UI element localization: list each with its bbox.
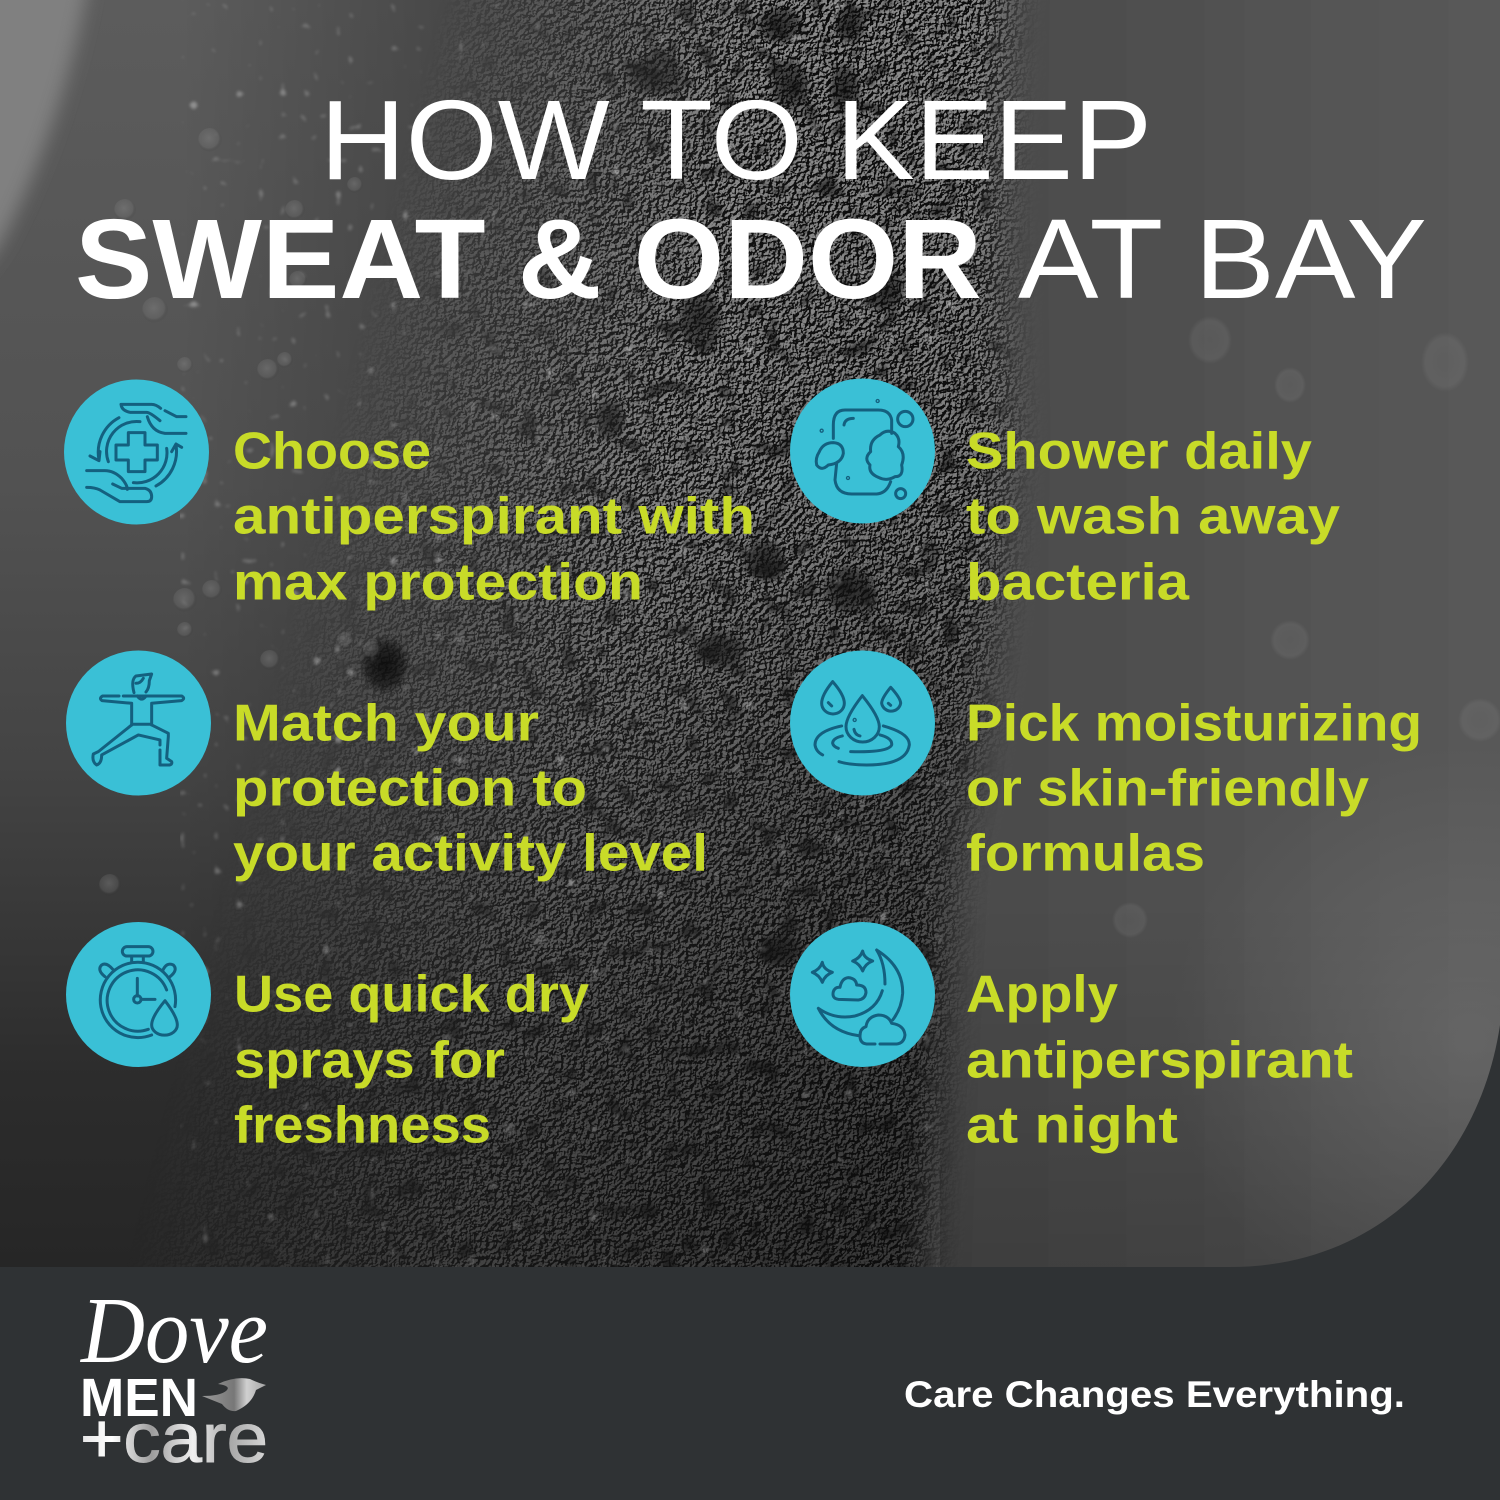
tip text: antiperspirant with <box>233 488 755 546</box>
tip 3: quick dry sprays <box>66 922 589 1154</box>
title line 1: HOW TO KEEP <box>320 77 1152 203</box>
tip text: Match your <box>233 694 539 752</box>
tip 1: choose antiperspirant <box>64 380 755 612</box>
tip text: antiperspirant <box>966 1032 1353 1090</box>
icon: water drops and ripples <box>790 650 935 796</box>
icon: soap and foam <box>790 378 935 524</box>
tip text: or skin-friendly <box>966 760 1369 818</box>
tip text: sprays for <box>234 1032 505 1090</box>
tip text: to wash away <box>966 488 1340 546</box>
tip text: bacteria <box>966 554 1190 612</box>
icon: moon, stars and clouds <box>790 922 935 1067</box>
tip text: Pick moisturizing <box>966 694 1422 752</box>
logo word +care: +care <box>80 1399 268 1477</box>
tip text: Choose <box>233 422 431 480</box>
tip text: max protection <box>233 554 643 612</box>
tagline: Care Changes Everything. <box>904 1374 1405 1415</box>
tip 5: moisturizing formulas <box>790 650 1422 882</box>
footer band with curved corner <box>0 1025 1500 1500</box>
tip text: Use quick dry <box>234 966 589 1024</box>
title <box>75 77 1427 322</box>
logo: Dove Men+Care <box>79 1279 268 1477</box>
title line 2: SWEAT & ODOR <box>75 196 982 322</box>
tip 6: apply at night <box>790 922 1353 1154</box>
logo wordmark Dove: Dove <box>79 1279 268 1383</box>
title line 2: AT BAY <box>1018 196 1427 322</box>
tip text: protection to <box>233 760 587 818</box>
icon: stopwatch and drop <box>66 922 211 1067</box>
tip text: Shower daily <box>966 422 1312 480</box>
tip text: formulas <box>966 824 1205 882</box>
tip text: freshness <box>234 1096 491 1154</box>
tip 4: shower daily <box>790 378 1340 612</box>
tip 2: match protection to activity <box>66 650 708 882</box>
tip text: Apply <box>966 966 1118 1024</box>
tip text: your activity level <box>233 824 708 882</box>
icon: yoga pose <box>66 650 211 796</box>
tip text: at night <box>966 1096 1178 1154</box>
icon: hands and medical cross <box>64 380 209 524</box>
logo word MEN: MEN <box>80 1368 198 1428</box>
logo dove bird <box>202 1378 266 1411</box>
